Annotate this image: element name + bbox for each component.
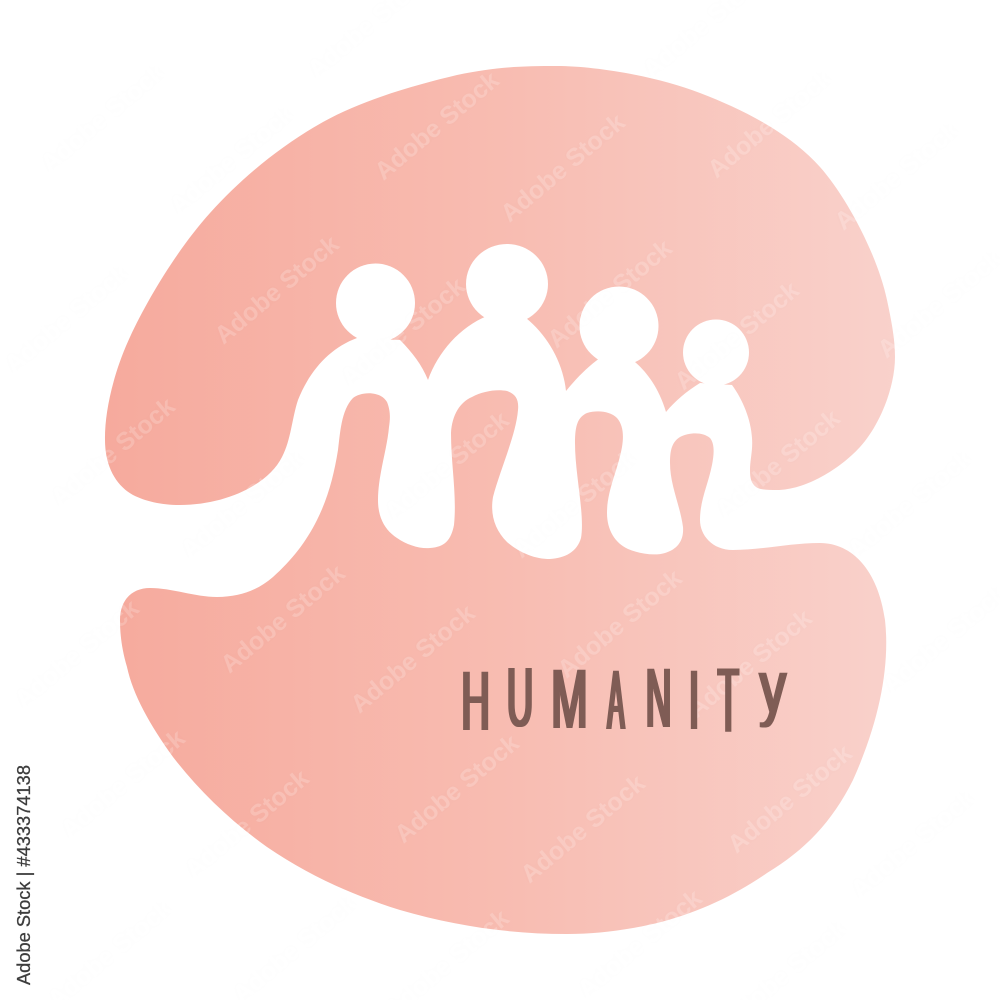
watermark pattern: Adobe Stock bbox=[55, 724, 190, 844]
watermark pattern: Adobe Stock bbox=[389, 729, 524, 849]
title: HUMANITY: A bbox=[608, 654, 625, 748]
title: HUMANITY: y bbox=[760, 645, 787, 728]
watermark pattern: Adobe Stock bbox=[215, 559, 350, 679]
blob: lower shape with fingers between figures bbox=[120, 390, 886, 934]
title: HUMANITY: U bbox=[507, 649, 533, 744]
watermark pattern: Adobe Stock bbox=[515, 769, 650, 889]
watermark pattern: Adobe Stock bbox=[369, 66, 504, 186]
watermark pattern: Adobe Stock bbox=[702, 64, 837, 184]
watermark pattern: Adobe Stock bbox=[842, 444, 977, 564]
title: HUMANITY: N bbox=[646, 651, 671, 745]
title: HUMANITY: H bbox=[461, 654, 490, 748]
watermark pattern: Adobe Stock bbox=[507, 444, 642, 564]
stock credit: Adobe Stock | #433374138 bbox=[13, 765, 34, 985]
figure 2 head bbox=[466, 244, 548, 324]
title: HUMANITY: I bbox=[689, 652, 699, 747]
watermark pattern: Adobe Stock bbox=[335, 272, 470, 392]
watermark pattern: Adobe Stock bbox=[845, 784, 980, 904]
watermark pattern: Adobe Stock bbox=[829, 116, 964, 236]
title: HUMANITY: M bbox=[551, 653, 588, 747]
watermark pattern: Adobe Stock bbox=[379, 406, 514, 526]
title: HUMANITY bbox=[461, 645, 787, 752]
watermark pattern: Adobe Stock bbox=[45, 392, 180, 512]
watermark pattern: Adobe Stock bbox=[35, 58, 170, 178]
watermark pattern: Adobe Stock bbox=[722, 739, 857, 859]
blob: upper shape bbox=[105, 66, 895, 505]
watermark pattern: Adobe Stock bbox=[345, 599, 480, 719]
watermark pattern: Adobe Stock bbox=[0, 259, 134, 379]
watermark pattern: Adobe Stock bbox=[682, 604, 817, 724]
figure 3 head bbox=[580, 286, 658, 366]
watermark pattern: Adobe Stock bbox=[9, 594, 144, 714]
watermark pattern: Adobe Stock bbox=[209, 230, 344, 350]
watermark pattern: Adobe Stock bbox=[495, 108, 630, 228]
title: HUMANITY: T bbox=[718, 649, 739, 752]
watermark pattern: Adobe Stock bbox=[164, 100, 299, 220]
watermark pattern: Adobe Stock bbox=[179, 764, 314, 884]
watermark pattern: Adobe Stock bbox=[669, 276, 804, 396]
watermark pattern: Adobe Stock bbox=[710, 404, 845, 524]
watermark pattern: Adobe Stock bbox=[175, 444, 310, 564]
watermark pattern: Adobe Stock bbox=[542, 234, 677, 354]
watermark pattern: Adobe Stock bbox=[552, 564, 687, 684]
figure 1 head bbox=[336, 264, 415, 342]
figure 4 head bbox=[683, 320, 749, 386]
